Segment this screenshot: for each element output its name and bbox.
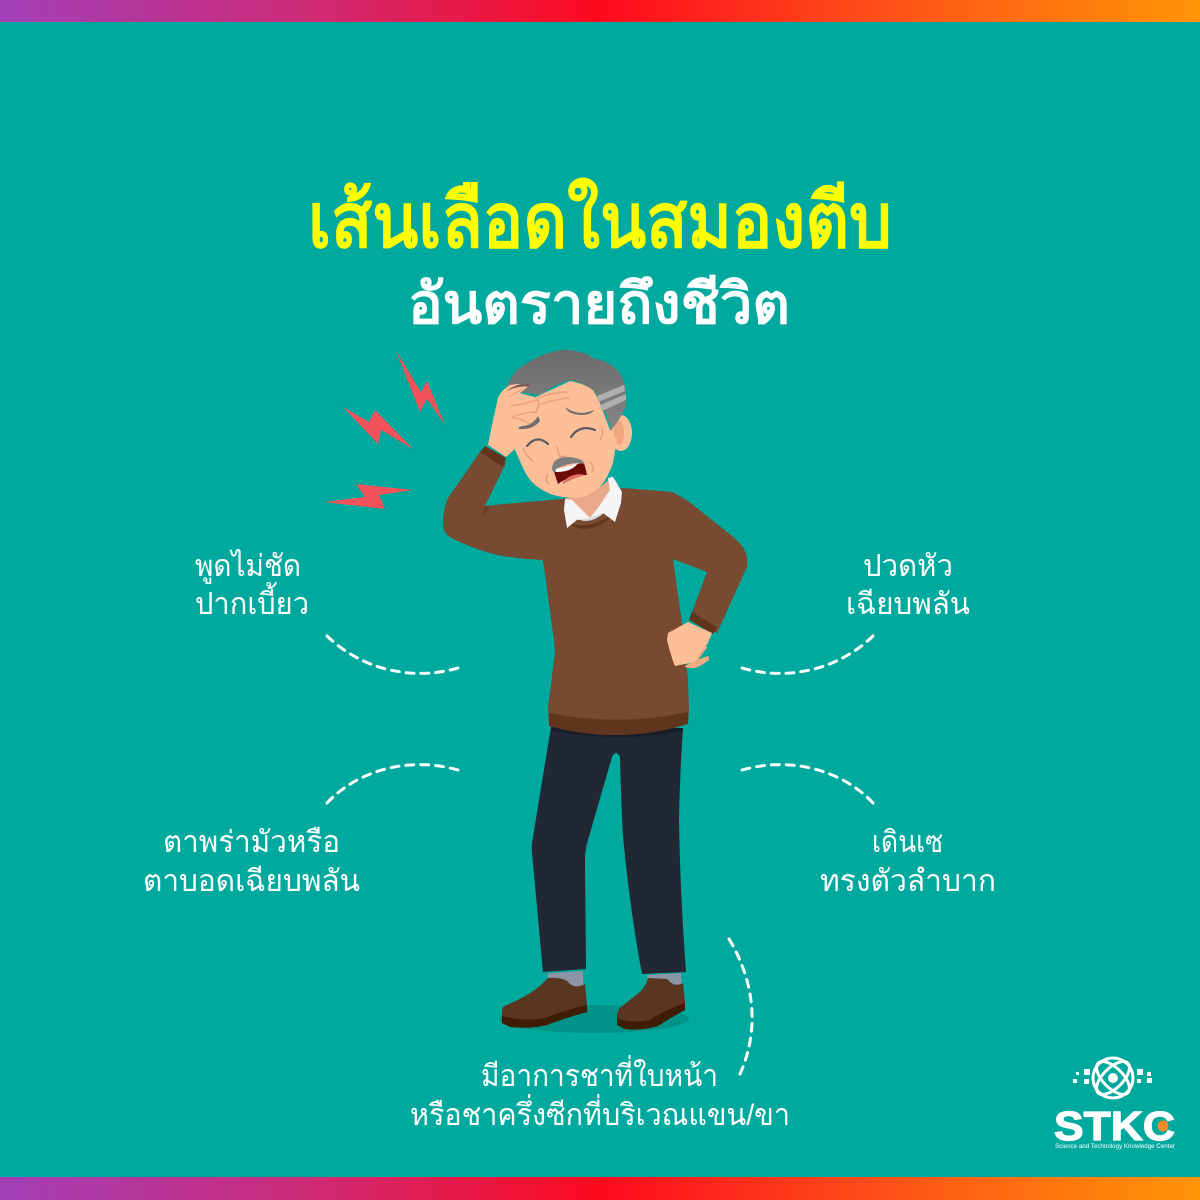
dashed arc: numbness [729,939,752,1074]
hair [505,350,626,431]
eyes [527,428,595,446]
dashed arc: balance [742,765,873,803]
symptom text: sudden headache [846,550,970,621]
symptom text: slurred speech [195,548,309,621]
shirt under collar [575,508,605,521]
ground shadow [499,1005,689,1033]
dashed arc: vision [327,765,458,803]
neck [565,476,618,518]
right shoe [617,978,685,1030]
eyebrows [565,407,594,415]
symptom text: numbness: หรือชาครึ่งซีกที่บริเวณแขน/ขา [410,1094,790,1132]
title [308,177,892,335]
icon: pain lightning bolts [324,351,445,509]
ear [610,415,632,451]
hand on hip [688,622,712,649]
right cuff [689,612,717,634]
symptom text: balance problems [820,826,996,898]
symptom text: balance problems: ทรงตัวลำบาก [820,865,996,898]
symptom text: slurred speech: พูดไม่ชัด [195,548,301,584]
neckline [566,490,622,529]
left cuff [480,446,506,467]
mouth [554,463,587,484]
symptom text: blurred vision [143,826,360,898]
symptom text: blurred vision: ตาบอดเฉียบพลัน [143,865,360,898]
socks [548,971,583,987]
symptom text: numbness [410,1055,790,1132]
teeth [554,463,578,472]
logo atom icon [1091,1056,1135,1100]
logo pixel squares [1073,1069,1152,1084]
hair stripes [597,385,625,402]
title: อันตรายถึงชีวิต [408,272,790,335]
logo tagline: Science and Technology Knowledge Center [1055,1144,1175,1150]
symptom text: sudden headache: ปวดหัว [863,550,953,583]
collar [564,499,590,528]
sweater [443,452,747,735]
sweater hem [549,712,688,735]
bottom gradient bar [0,1177,1200,1200]
trousers [532,727,686,974]
moustache [552,457,584,473]
symptom text: numbness: มีอาการชาที่ใบหน้า [481,1055,718,1093]
hand on forehead [488,384,538,457]
top gradient bar [0,0,1200,22]
logo wordmark: STKC [1054,1103,1175,1149]
dashed arc: speech [327,636,458,673]
left shoe [502,978,587,1028]
symptom text: balance problems: เดินเซ [872,826,943,859]
face [511,381,617,498]
title: เส้นเลือดในสมองตีบ [308,177,892,264]
symptom text: sudden headache: เฉียบพลัน [846,588,970,621]
dashed arc: headache [742,636,873,673]
logo: STKC [1054,1056,1175,1150]
logo orange dot [1158,1120,1168,1132]
face lines [523,428,603,484]
symptom text: blurred vision: ตาพร่ามัวหรือ [163,826,340,859]
elbow crease [481,506,491,518]
symptom text: slurred speech: ปากเบี้ยว [195,582,309,621]
forehead wrinkles [538,392,570,405]
illustration: elderly man holding head [443,350,747,1033]
